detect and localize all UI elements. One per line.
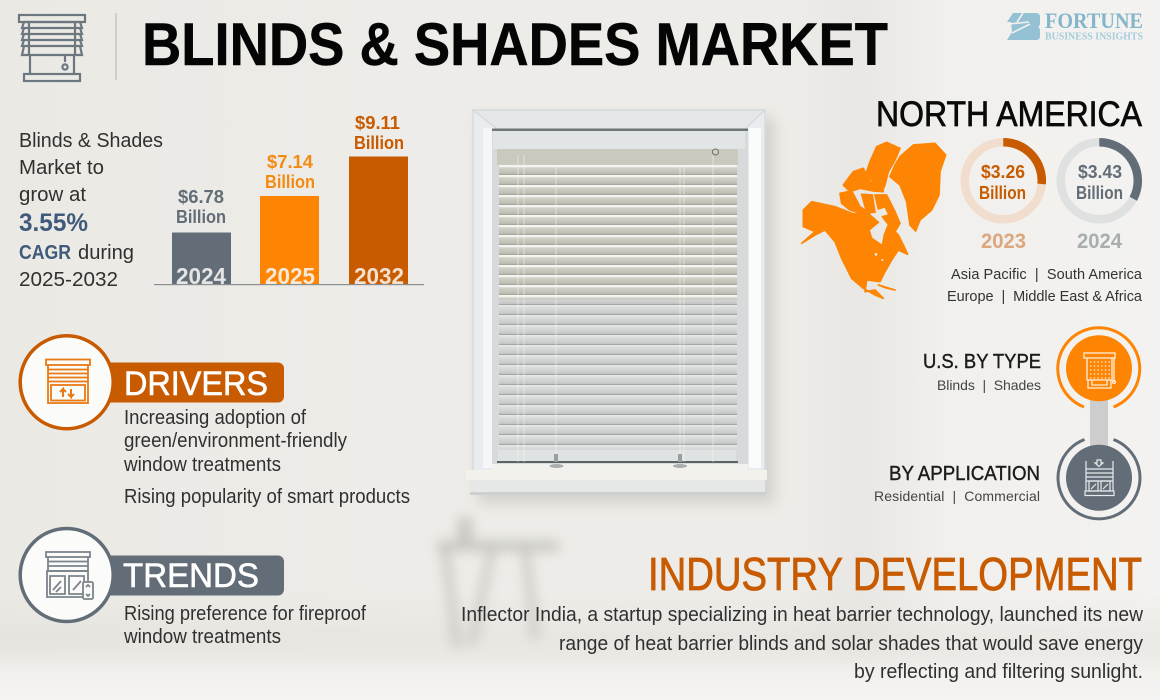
bar 2024 [172, 187, 231, 289]
panel: trends: TRENDS [123, 557, 259, 595]
bar 2032: 2032 [354, 263, 404, 289]
segment: U.S. by type: Blinds | Shades [937, 377, 1041, 393]
heading: North America: NORTH AMERICA [876, 95, 1143, 134]
text: industry development body: Inflector India, a startup specializing in heat barrier technology, launched its new [461, 604, 1144, 626]
panel: market growth text: Blinds & Shades [19, 130, 163, 152]
photo: window with blinds [466, 110, 774, 503]
segment: by application: BY APPLICATION [889, 463, 1040, 485]
panel: trends: window treatments [123, 626, 281, 648]
slats [493, 131, 745, 463]
regions list: Asia Pacific | South America [951, 267, 1143, 283]
panel: trends [20, 528, 366, 648]
icon: window blind [19, 15, 85, 81]
bar 2025: $7.14 [267, 152, 313, 172]
panel: drivers: window treatments [123, 454, 281, 476]
bar 2032 [349, 113, 408, 289]
regions list [947, 267, 1143, 305]
bar 2024: $6.78 [178, 187, 224, 207]
panel: market growth text: Market to [19, 157, 104, 179]
icon: window with shutter [1058, 440, 1140, 519]
bar 2025: Billion [265, 172, 315, 192]
panel: market growth text: grow at [19, 184, 86, 206]
panel: trends: Rising preference for fireproof [124, 603, 366, 625]
bar 2025 [260, 152, 319, 289]
text: industry development body: range of heat barrier blinds and solar shades that would save energy [559, 633, 1143, 655]
donut chart: 2023: 2023 [981, 230, 1026, 253]
blurred table in background [437, 518, 559, 648]
panel: market growth text: 2025-2032 [19, 269, 118, 291]
logo: Fortune Business Insights [1007, 8, 1143, 42]
panel: drivers: Increasing adoption of [124, 407, 306, 429]
segment: by application [874, 440, 1140, 519]
logo: Fortune Business Insights: FORTUNE [1045, 8, 1143, 33]
donut chart: 2023 [965, 142, 1042, 253]
icon: roller blind [1058, 328, 1140, 407]
panel: drivers: DRIVERS [124, 365, 268, 403]
segment: U.S. by type: U.S. BY TYPE [923, 351, 1041, 373]
panel: drivers: Rising popularity of smart products [124, 486, 410, 508]
panel: market growth text: CAGR [19, 242, 71, 264]
donut chart: 2023: Billion [979, 183, 1026, 203]
bar 2032: Billion [354, 133, 404, 153]
panel: market growth text: 3.55% [19, 209, 88, 237]
panel: market growth text [19, 130, 163, 291]
donut chart: 2024 [1061, 142, 1138, 253]
text: industry development body: by reflecting and filtering sunlight. [854, 661, 1143, 683]
donut chart: 2024: Billion [1076, 183, 1123, 203]
panel: drivers: green/environment-friendly [124, 430, 347, 452]
map: North America [802, 142, 946, 298]
bar 2032: $9.11 [355, 113, 400, 133]
donut chart: 2023: $3.26 [981, 162, 1025, 182]
regions list: Europe | Middle East & Africa [947, 289, 1143, 305]
panel: drivers [20, 336, 410, 508]
bar 2024: 2024 [176, 263, 226, 289]
bar 2025: 2025 [265, 263, 315, 289]
connector [1090, 400, 1108, 448]
donut chart: 2024: 2024 [1077, 230, 1122, 253]
title: BLINDS & SHADES MARKET [142, 11, 888, 78]
donut chart: 2024: $3.43 [1078, 162, 1122, 182]
icon: shutter window with remote [20, 528, 113, 622]
bar 2024: Billion [176, 207, 226, 227]
segment: U.S. by type [923, 328, 1140, 407]
text: industry development body [461, 604, 1144, 683]
panel: market growth text: during [78, 242, 134, 264]
icon: roller shutter with arrows [20, 336, 113, 429]
bar chart: market size [154, 113, 424, 289]
logo: Fortune Business Insights: BUSINESS INSIGHTS [1045, 30, 1143, 42]
segment: by application: Residential | Commercial [874, 488, 1040, 504]
